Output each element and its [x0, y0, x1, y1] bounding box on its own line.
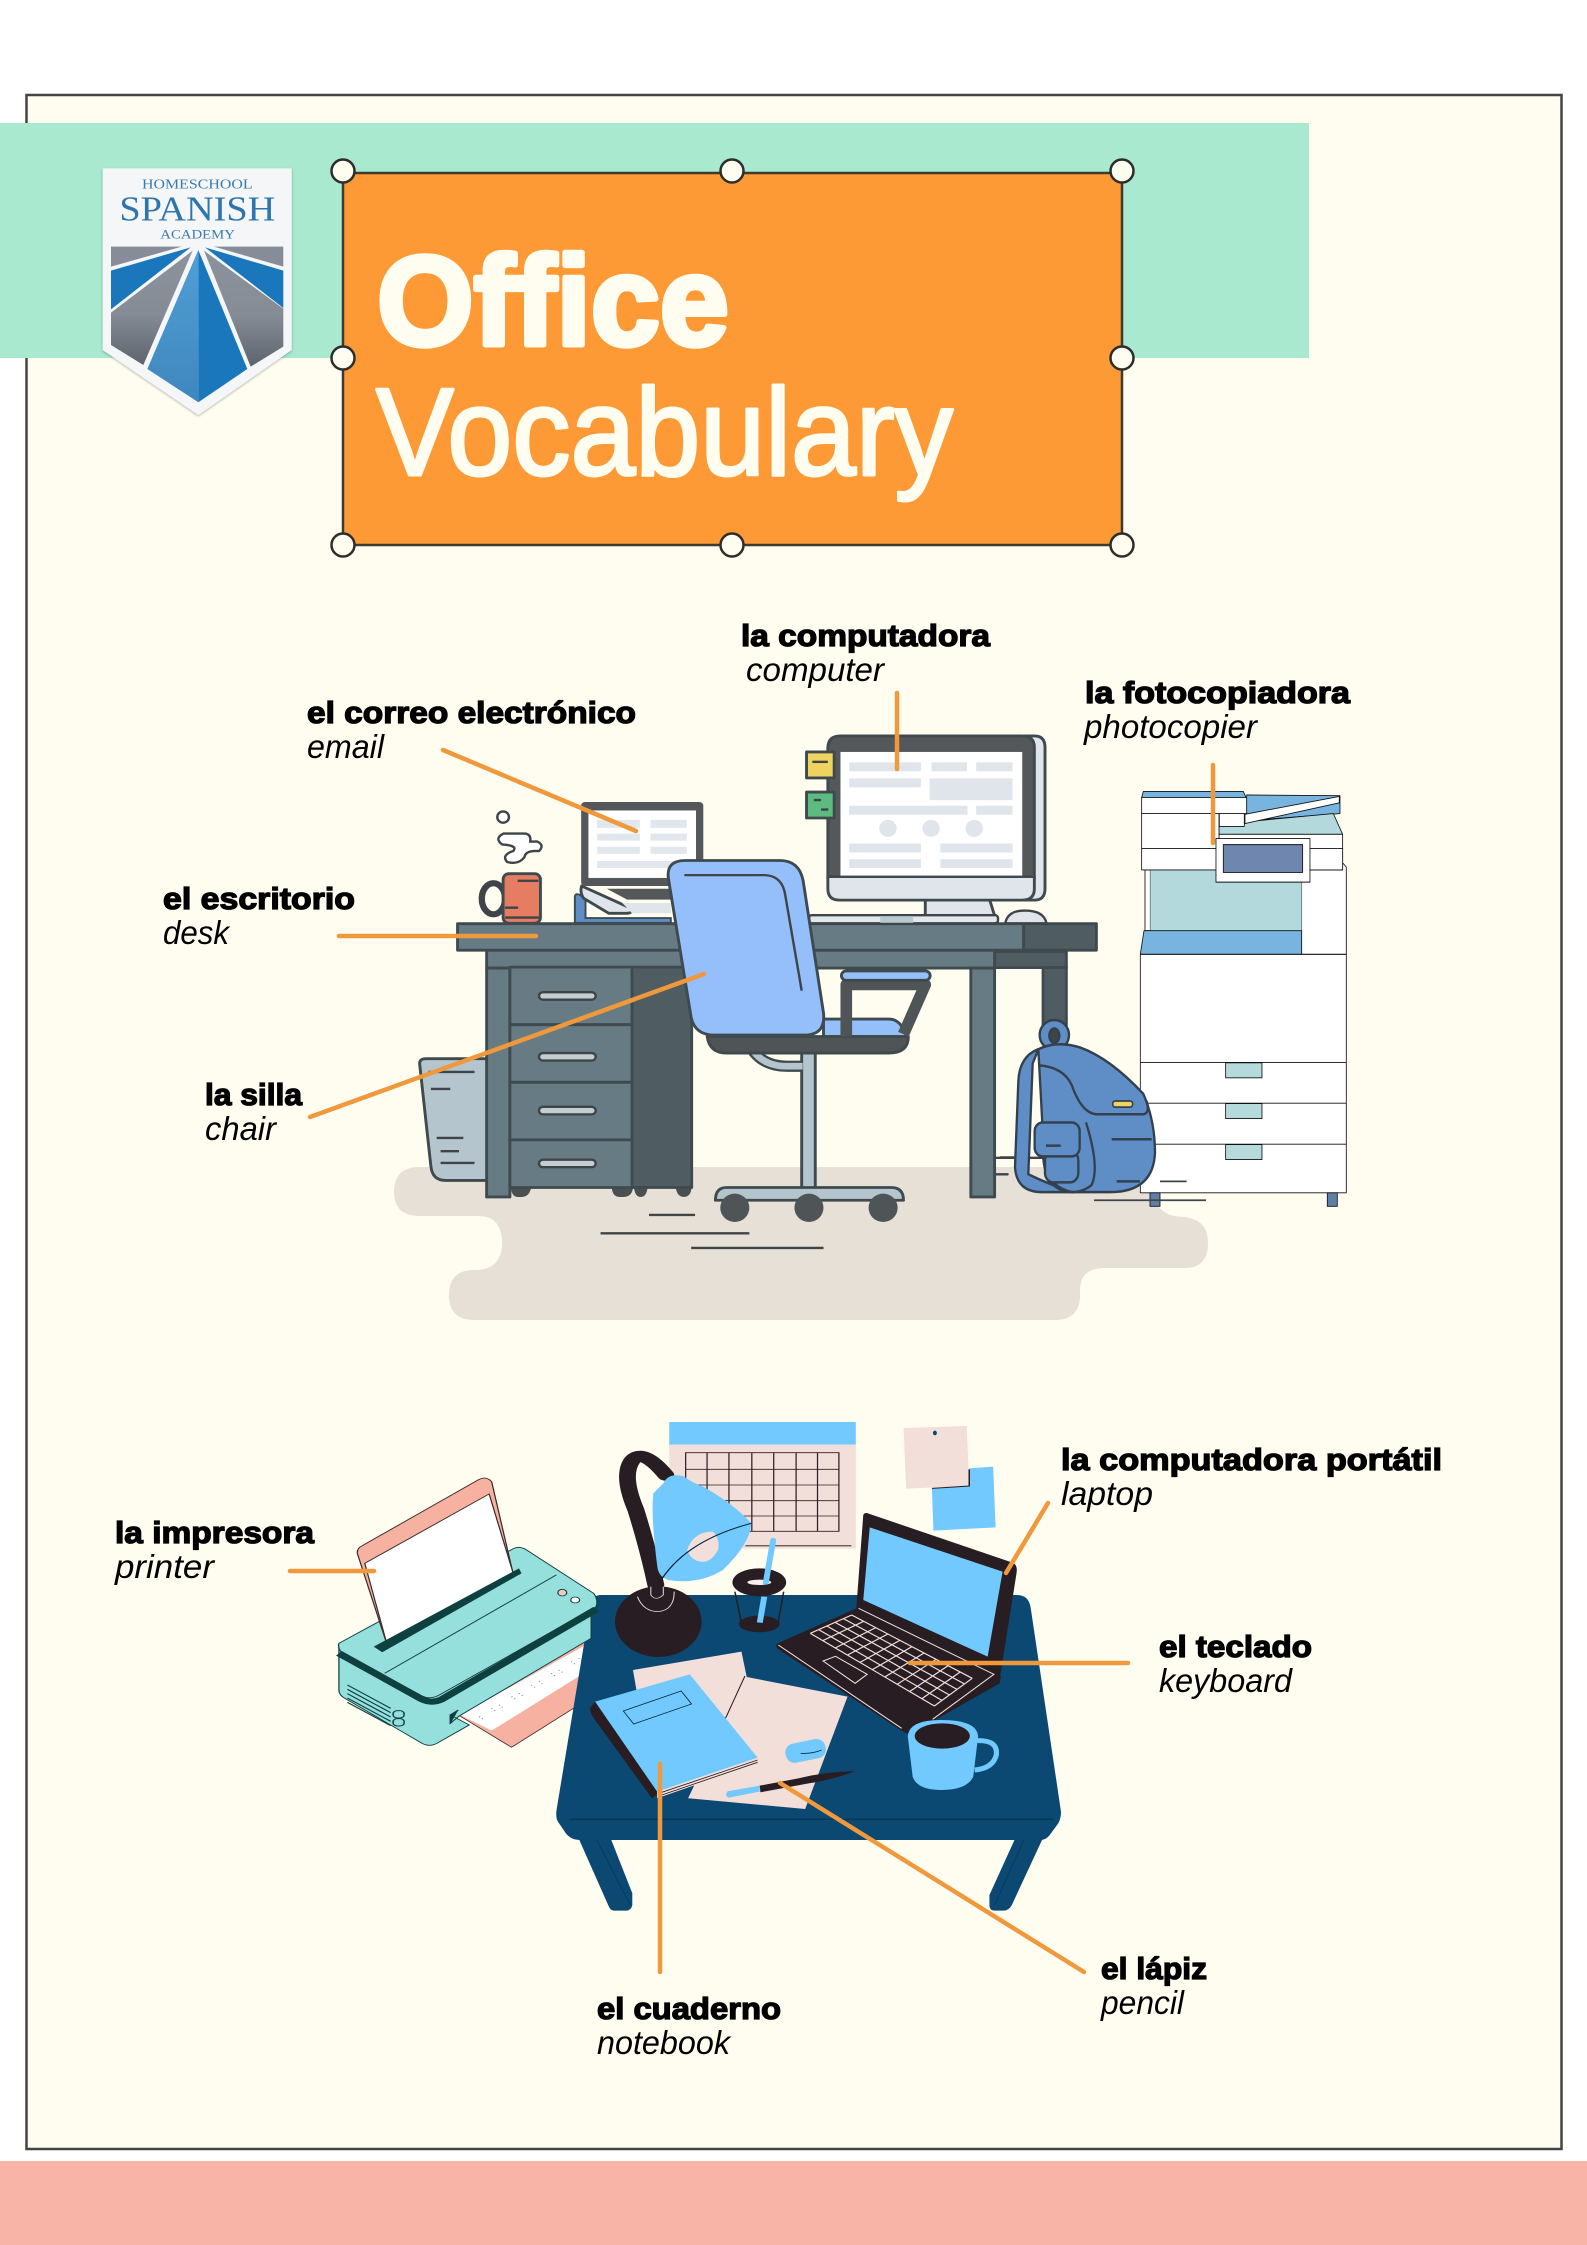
printer output tray [458, 1620, 618, 1747]
illustration: office desk scene [420, 736, 1096, 1248]
logo: Homeschool Spanish Academy shield: ACADEMY [160, 227, 235, 241]
table [556, 1595, 1061, 1911]
sticky notes [807, 752, 834, 818]
label: la computadora portátil: laptop [1061, 1475, 1153, 1512]
label: el lápiz [1100, 1951, 1207, 2021]
label: el teclado: keyboard [1159, 1662, 1294, 1699]
title: Vocabulary: Vocabulary [376, 364, 953, 502]
glass with pen [732, 1540, 786, 1632]
title block [332, 160, 1134, 556]
footer band [0, 2161, 1587, 2245]
laptop [776, 1513, 1017, 1734]
label: la impresora [114, 1515, 315, 1585]
label: la computadora: computer [746, 651, 886, 688]
notebook [590, 1674, 758, 1798]
leader line: pencil [780, 1783, 1084, 1972]
label: la silla: la silla [205, 1077, 303, 1112]
logo: Homeschool Spanish Academy shield: HOMESCHOOL [142, 176, 253, 191]
label: la impresora: printer [114, 1548, 216, 1585]
leader line: computer [895, 693, 899, 769]
label: la silla [205, 1077, 303, 1147]
trash can [420, 1059, 489, 1180]
label: la computadora portátil: la computadora portátil [1061, 1442, 1442, 1477]
label: la silla: chair [205, 1110, 278, 1147]
label: la computadora [741, 618, 991, 688]
coffee mug [908, 1720, 996, 1790]
pinned notes [904, 1426, 996, 1531]
label: la fotocopiadora [1083, 675, 1351, 745]
logo: Homeschool Spanish Academy shield: SPANISH [119, 189, 275, 228]
eraser [784, 1737, 828, 1764]
desk lamp [615, 1456, 751, 1657]
label: el escritorio: el escritorio [163, 881, 355, 916]
mug [482, 811, 542, 923]
logo: Homeschool Spanish Academy shield [103, 168, 292, 415]
printer [339, 1478, 597, 1745]
paper tray [357, 1478, 521, 1652]
leader line: laptop [1006, 1503, 1048, 1573]
desk [458, 924, 1096, 1197]
label: el teclado: el teclado [1159, 1629, 1312, 1664]
leader line: photocopier [1211, 765, 1215, 843]
label: el lápiz: el lápiz [1101, 1951, 1207, 1986]
label: el cuaderno: el cuaderno [597, 1991, 781, 2026]
calendar [669, 1422, 996, 1549]
illustration: top-down desk scene [339, 1422, 1061, 1911]
leader line: desk [339, 934, 536, 938]
label: el correo electrónico: el correo electrónico [307, 695, 636, 730]
leader line: email [443, 750, 636, 831]
label: la impresora: la impresora [115, 1515, 315, 1550]
pencil [726, 1771, 855, 1798]
title: Office: Office [377, 230, 729, 372]
label: el escritorio: desk [163, 914, 230, 951]
leader line: keyboard [910, 1661, 1128, 1665]
leader line: printer [290, 1569, 374, 1573]
label: la computadora: la computadora [741, 618, 991, 653]
label: la fotocopiadora: photocopier [1083, 708, 1259, 745]
label: el cuaderno [597, 1991, 781, 2061]
floor blob [394, 1167, 1208, 1320]
leader line: notebook [658, 1764, 662, 1972]
backpack [1015, 1020, 1155, 1192]
desktop monitor [807, 736, 1046, 923]
label: el escritorio [163, 881, 355, 951]
label: el teclado [1159, 1629, 1312, 1699]
chair [668, 860, 930, 1222]
header band [0, 123, 1309, 358]
label: el correo electrónico [307, 695, 636, 765]
photocopier [1140, 791, 1346, 1206]
illustration: photocopier and backpack [1000, 791, 1346, 1206]
leader line: chair [310, 974, 704, 1117]
label: el cuaderno: notebook [597, 2024, 731, 2061]
label: la fotocopiadora: la fotocopiadora [1085, 675, 1351, 710]
label: el lápiz: pencil [1100, 1984, 1186, 2021]
papers, notebook, pencil and mug [590, 1652, 996, 1809]
label: la computadora portátil [1061, 1442, 1442, 1512]
label: el correo electrónico: email [307, 728, 386, 765]
small laptop [575, 802, 703, 923]
papers [633, 1652, 848, 1809]
selection handles [332, 160, 1134, 556]
back desk leg [995, 952, 1066, 968]
drawer unit [510, 967, 692, 1197]
